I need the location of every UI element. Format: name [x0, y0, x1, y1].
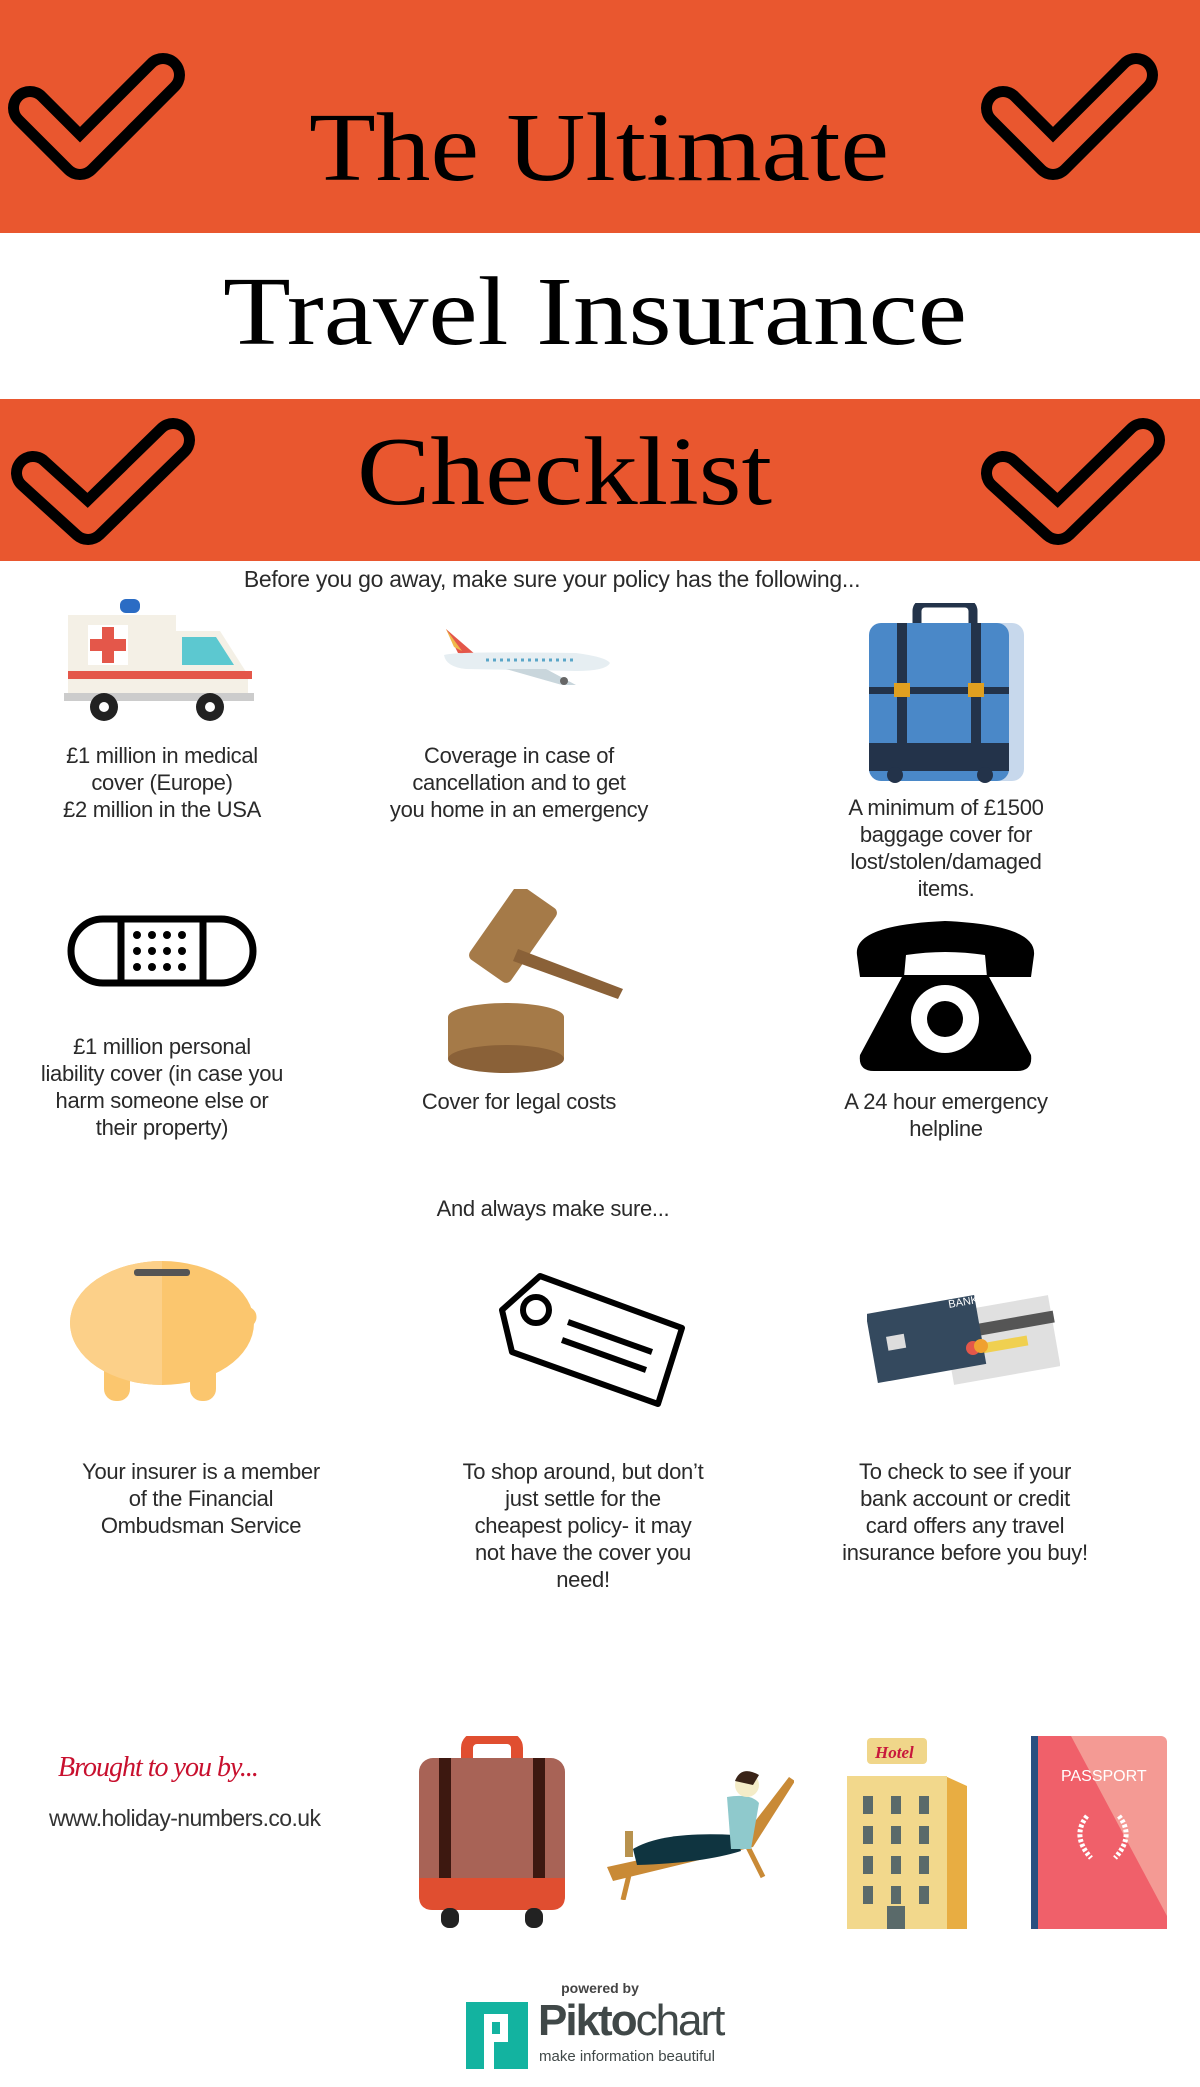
text: liability: their property) [96, 1115, 228, 1140]
powered by: powered by [561, 1980, 639, 1996]
title: Checklist [357, 418, 772, 526]
text: baggage: items. [918, 876, 974, 901]
text: cancellation [390, 743, 648, 822]
subheading: And always make sure... [437, 1196, 669, 1221]
header band top [0, 0, 1200, 233]
icon: lounger [607, 1771, 794, 1900]
icon: bank cards: BANK [947, 1294, 980, 1311]
icon: checkmark top right [1003, 75, 1136, 158]
logo: piktochart [466, 1996, 726, 2069]
text: ombudsman: Ombudsman Service [101, 1513, 301, 1538]
footer credit: Brought to you by... [58, 1752, 258, 1783]
text: medical cover: £2 million in the USA [63, 797, 261, 822]
icon: blue suitcase [869, 603, 1024, 783]
text: bank account: To check to see if your [859, 1459, 1071, 1484]
title: Travel Insurance [223, 258, 967, 366]
icon: checkmark bottom right [1003, 440, 1143, 523]
text: helpline: helpline [909, 1116, 983, 1141]
text: liability: £1 million personal [73, 1034, 251, 1059]
icon: checkmark top left [30, 75, 163, 158]
text: bank account [842, 1459, 1088, 1565]
text: medical cover: £1 million in medical [66, 743, 258, 768]
text: bank account: insurance before you buy! [842, 1540, 1088, 1565]
text: shop around [463, 1459, 704, 1592]
icon: footer suitcase [419, 1736, 565, 1928]
icon: price tag [499, 1273, 685, 1407]
text: shop around: need! [556, 1567, 610, 1592]
text: baggage: A minimum of £1500 [848, 795, 1044, 820]
text: ombudsman: Your insurer is a member [82, 1459, 320, 1484]
text: cancellation: Coverage in case of [424, 743, 614, 768]
text: liability: harm someone else or [56, 1088, 268, 1113]
text: liability [41, 1034, 283, 1140]
icon: bandage [68, 916, 256, 986]
text: bank account: card offers any travel [866, 1513, 1064, 1538]
icon: hotel: Hotel [874, 1743, 914, 1762]
icon: checkmark bottom left [33, 440, 173, 523]
logo: piktochart: make information beautiful [539, 2048, 715, 2065]
icon: gavel [448, 889, 623, 1073]
text: baggage: lost/stolen/damaged [850, 849, 1042, 874]
text: medical cover: cover (Europe) [91, 770, 233, 795]
text: shop around: cheapest policy- it may [475, 1513, 691, 1538]
icon: airplane [444, 629, 610, 685]
text: baggage [848, 795, 1044, 901]
text: legal: Cover for legal costs [422, 1089, 616, 1114]
text: ombudsman: of the Financial [129, 1486, 273, 1511]
title: The Ultimate [309, 94, 889, 202]
text: shop around: To shop around, but don’t [463, 1459, 703, 1484]
icon: hotel [847, 1738, 967, 1929]
title [223, 94, 967, 526]
text: baggage: baggage cover for [860, 822, 1032, 847]
text: liability: liability cover (in case you [41, 1061, 283, 1086]
icon: passport: PASSPORT [1061, 1768, 1147, 1785]
intro text: Before you go away, make sure your policy has the following... [244, 566, 860, 592]
text: helpline [844, 1089, 1048, 1141]
icon: piggy bank [70, 1261, 256, 1401]
text: shop around: just settle for the [505, 1486, 661, 1511]
text: shop around: not have the cover you [475, 1540, 691, 1565]
icon: telephone [856, 921, 1034, 1071]
text: ombudsman [82, 1459, 320, 1538]
header band bottom [0, 399, 1200, 561]
text: helpline: A 24 hour emergency [844, 1089, 1048, 1114]
footer url: www.holiday-numbers.co.uk [49, 1805, 320, 1831]
text: cancellation: cancellation and to get [412, 770, 626, 795]
icon: bank cards [867, 1294, 1060, 1385]
icon: ambulance [64, 599, 254, 721]
icon: passport [1031, 1736, 1167, 1929]
text: medical cover [63, 743, 262, 822]
header [0, 0, 1200, 561]
text: cancellation: you home in an emergency [390, 797, 648, 822]
logo: piktochart: Piktochart [538, 1996, 723, 2045]
text: bank account: bank account or credit [860, 1486, 1070, 1511]
